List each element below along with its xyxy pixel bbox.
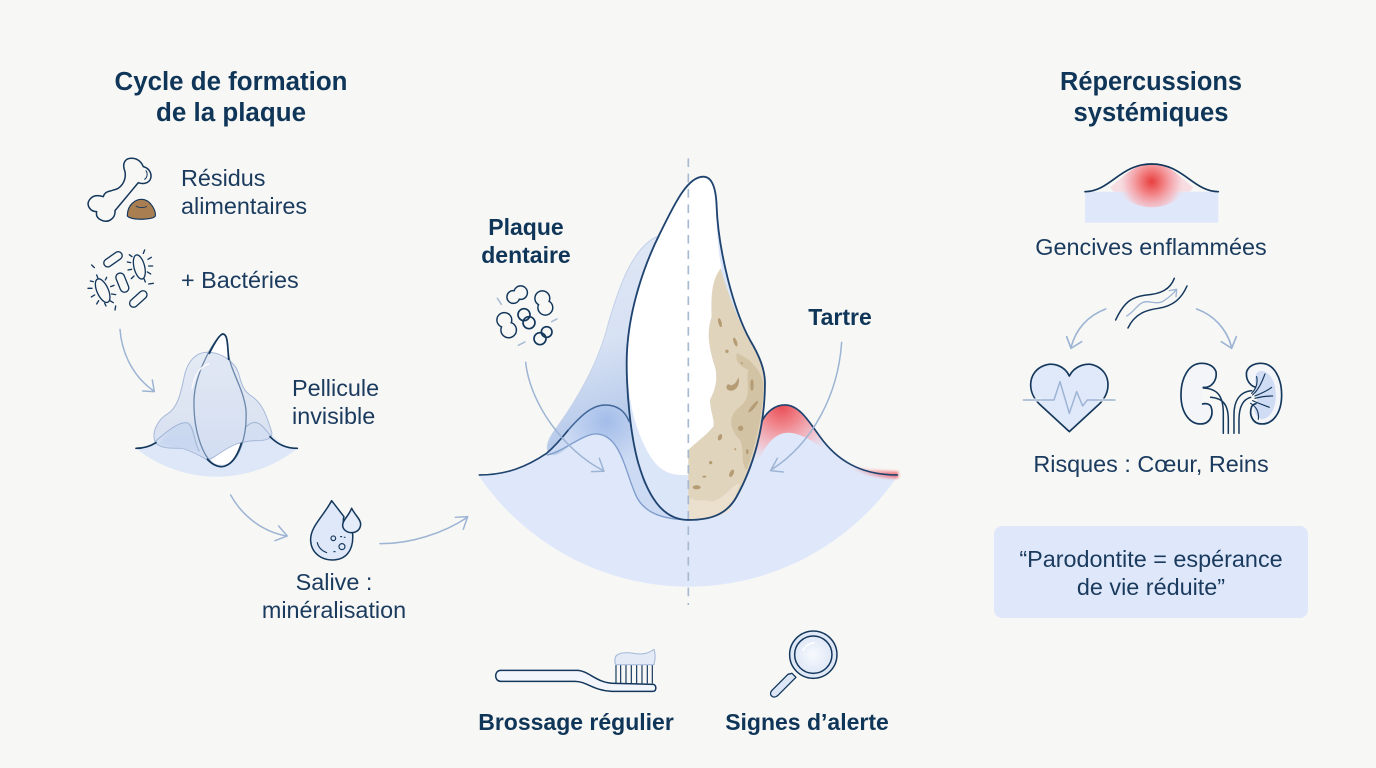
label: plaque dentaire: Plaque bbox=[488, 214, 564, 240]
text: résidus alimentaires: Résidus bbox=[181, 165, 266, 191]
arrow: bacteria to pellicle bbox=[120, 329, 154, 392]
text: pellicule invisible: Pellicule bbox=[292, 375, 379, 401]
text: pellicule invisible bbox=[292, 375, 379, 429]
icon: plaque bacteria clusters bbox=[497, 286, 557, 345]
text: salive minéralisation: Salive : bbox=[296, 569, 372, 595]
tooth outline bbox=[627, 177, 765, 520]
text: risques coeur reins: Risques : Cœur, Reins bbox=[1033, 451, 1269, 477]
gum contour left bbox=[479, 430, 568, 475]
title: répercussions systémiques: Répercussions bbox=[1060, 68, 1242, 96]
icon: food residues bbox=[88, 158, 155, 221]
plaque film bbox=[547, 236, 658, 493]
callout: parodontite quote: “Parodontite = espérance bbox=[1019, 546, 1283, 572]
label: plaque dentaire bbox=[481, 214, 571, 268]
title: répercussions systémiques: systémiques bbox=[1074, 99, 1228, 127]
text: salive minéralisation: minéralisation bbox=[262, 597, 406, 623]
callout: parodontite quote: de vie réduite” bbox=[1077, 574, 1225, 600]
text: pellicule invisible: invisible bbox=[292, 403, 375, 429]
label: brossage régulier: Brossage régulier bbox=[478, 709, 674, 735]
arrow: vessel to kidneys bbox=[1197, 309, 1236, 348]
icon: bacteria bbox=[88, 250, 153, 310]
title: cycle de formation de la plaque: de la plaque bbox=[156, 99, 306, 127]
text: gencives enflammées: Gencives enflammées bbox=[1035, 234, 1267, 260]
central tooth diagram bbox=[478, 158, 898, 605]
title: répercussions systémiques bbox=[1060, 68, 1242, 127]
title: cycle de formation de la plaque bbox=[114, 68, 348, 127]
icon: magnifying glass bbox=[771, 631, 837, 697]
label: signes d'alerte: Signes d’alerte bbox=[725, 709, 889, 735]
tartar bbox=[688, 268, 764, 519]
enamel white bbox=[628, 178, 722, 475]
icon: toothbrush bbox=[496, 649, 656, 691]
icon: heart with pulse bbox=[1023, 364, 1115, 432]
text: + bactéries: + Bactéries bbox=[181, 267, 299, 293]
inflamed gum right bbox=[743, 405, 837, 490]
arrow: pellicle to saliva bbox=[231, 495, 287, 541]
text: résidus alimentaires: alimentaires bbox=[181, 193, 307, 219]
icon: kidneys bbox=[1181, 363, 1282, 433]
callout: parodontite quote bbox=[994, 526, 1308, 618]
arrow: plaque bbox=[526, 362, 604, 472]
tooth body bbox=[627, 177, 765, 520]
gum contour right bbox=[762, 405, 897, 475]
gum base bbox=[478, 405, 898, 587]
text: salive minéralisation bbox=[262, 569, 406, 623]
gum pocket band bbox=[547, 405, 687, 520]
illustration: inflamed gum bbox=[1085, 164, 1218, 223]
arrow: vessel to heart bbox=[1067, 309, 1106, 348]
arrow: tartar bbox=[771, 342, 842, 472]
label: tartre: Tartre bbox=[808, 304, 872, 330]
illustration: invisible pellicle bbox=[136, 334, 297, 477]
arrow: saliva to main tooth bbox=[380, 517, 468, 544]
icon: saliva drops bbox=[311, 501, 361, 560]
icon: blood vessel bbox=[1116, 278, 1187, 328]
title: cycle de formation de la plaque: Cycle de formation bbox=[114, 68, 348, 96]
label: plaque dentaire: dentaire bbox=[481, 242, 571, 268]
dashed axis bbox=[686, 158, 691, 605]
text: résidus alimentaires bbox=[181, 165, 307, 219]
